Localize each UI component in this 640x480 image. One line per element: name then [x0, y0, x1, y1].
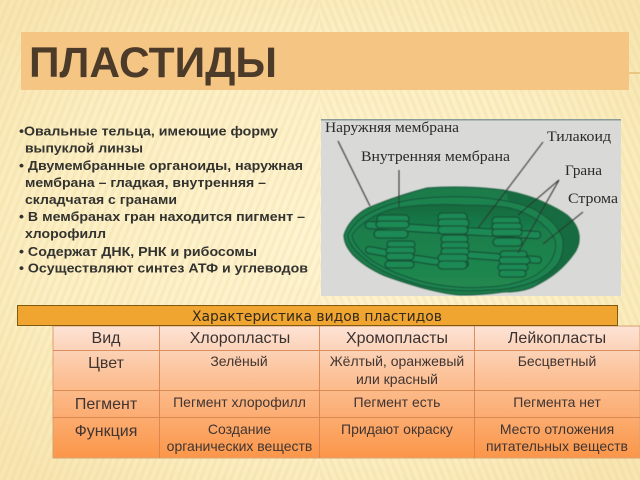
diagram labels: Грана: [565, 163, 603, 179]
grana stacks: [374, 213, 530, 277]
row: pigment: Пегмент есть: [354, 394, 440, 410]
row: function: питательных веществ: [486, 438, 628, 454]
bullet list: [19, 124, 308, 276]
title: [21, 32, 629, 90]
row: colour: Зелёный: [210, 353, 268, 369]
leader lines: [338, 141, 583, 253]
row: function: Место отложения: [500, 421, 614, 437]
chloroplast diagram: [321, 119, 621, 296]
row: colour: Бесцветный: [518, 353, 596, 369]
row: pigment: Пегмента нет: [513, 394, 601, 410]
row: colour: [88, 353, 596, 387]
row: pigment: Пегмент хлорофилл: [173, 394, 306, 410]
row: colour: или красный: [356, 371, 438, 387]
table of plastid types: [53, 326, 640, 458]
table header row: Хлоропласты: [190, 330, 290, 347]
row: function: Функция: [75, 423, 137, 440]
diagram labels: Наружняя мембрана: [325, 120, 460, 136]
thylakoid lamellae: [369, 225, 538, 264]
row: colour: Жёлтый, оранжевый: [330, 353, 464, 369]
row: pigment: [75, 394, 601, 413]
bullet list: • Осуществляют синтез АТФ и углеводов: [19, 260, 308, 276]
diagram labels: Тилакоид: [547, 129, 612, 145]
bullet list: • Двумембранные органоиды, наружная: [19, 158, 303, 173]
diagram labels: Внутренняя мембрана: [361, 149, 511, 165]
diagram labels: [325, 120, 619, 207]
table header row: Вид: [92, 330, 121, 347]
bullet list: выпуклой линзы: [25, 140, 143, 156]
table header row: Лейкопласты: [508, 330, 606, 347]
bullet list: хлорофилл: [25, 226, 106, 241]
table heading bar: Характеристика видов пластидов: [192, 309, 442, 325]
row: function: Создание: [208, 421, 271, 437]
chloroplast body: [338, 141, 583, 295]
row: function: органических веществ: [167, 438, 312, 454]
bullet list: • В мембранах гран находится пигмент –: [19, 209, 305, 224]
title: ПЛАСТИДЫ: [29, 40, 277, 87]
diagram labels: Строма: [568, 191, 619, 207]
table heading bar: [18, 306, 618, 326]
row: colour: Цвет: [88, 355, 125, 372]
row: function: [75, 421, 628, 454]
row: pigment: Пегмент: [75, 396, 138, 413]
bullet list: мембрана – гладкая, внутренняя –: [25, 175, 266, 190]
bullet list: складчатая с гранами: [25, 192, 177, 207]
table header row: Хромопласты: [346, 330, 448, 347]
bullet list: •Овальные тельца, имеющие форму: [19, 124, 279, 138]
bullet list: • Содержат ДНК, РНК и рибосомы: [19, 244, 257, 259]
row: function: Придают окраску: [341, 421, 453, 437]
table header row: [92, 330, 606, 347]
